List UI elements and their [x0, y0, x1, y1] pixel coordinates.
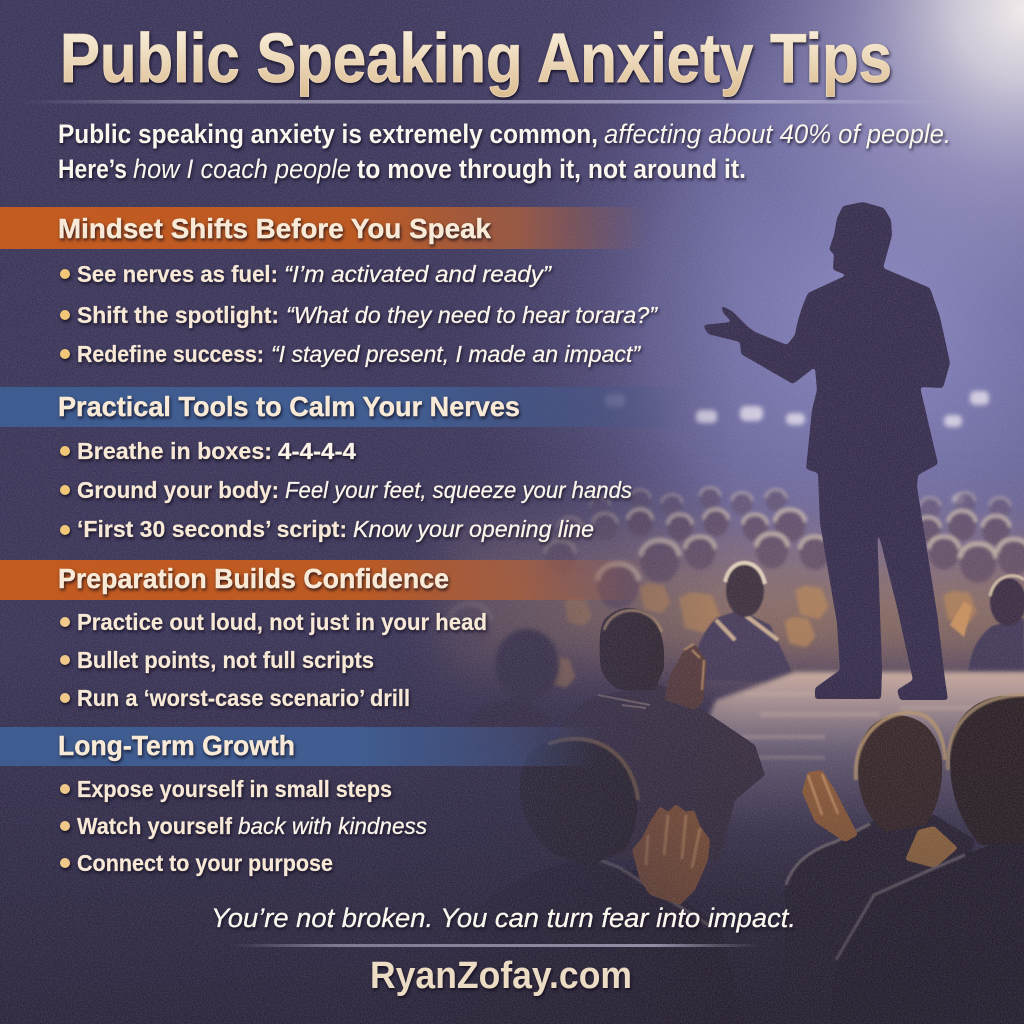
stage lights row — [605, 391, 989, 504]
title: Public Speaking Anxiety Tips — [60, 19, 892, 97]
audience member: foreground right — [785, 713, 975, 1024]
audience member: far right foreground — [828, 695, 1024, 1024]
section heading band: long-term growth — [0, 727, 600, 766]
section heading band: practical tools — [0, 387, 690, 427]
bullet: breathe in boxes — [60, 438, 356, 464]
bullet: see nerves as fuel: See nerves as fuel: — [77, 261, 278, 287]
section heading band: preparation: Preparation Builds Confidence — [58, 563, 449, 594]
bullet: expose yourself: Expose yourself in small steps — [77, 776, 392, 802]
closing line: You’re not broken. You can turn fear into impact. — [211, 903, 796, 933]
bullet: watch yourself back: Watch yourself — [77, 813, 232, 839]
intro text: affecting about 40% of people. — [604, 119, 951, 149]
bullet: practice out loud: Practice out loud, not just in your head — [77, 609, 487, 635]
bullet: watch yourself back: back with kindness — [238, 813, 427, 839]
bullet: worst-case drill: Run a ‘worst-case scenario’ drill — [77, 685, 410, 711]
right-row audience member — [950, 576, 1024, 672]
bullet: watch yourself back — [60, 813, 427, 839]
crowd in the distance — [440, 486, 1024, 745]
section heading band: mindset shifts: Mindset Shifts Before You Speak — [58, 213, 491, 244]
bullet: redefine success: “I stayed present, I made an impact” — [271, 341, 641, 367]
bullet: first 30 seconds — [60, 516, 594, 542]
bullet: connect to purpose: Connect to your purpose — [77, 850, 333, 876]
title divider — [20, 100, 950, 104]
panel: long-term growth — [0, 727, 600, 876]
panel: practical tools — [0, 387, 690, 542]
bullet: first 30 seconds: ‘First 30 seconds’ script: — [77, 516, 347, 542]
bullet: redefine success: Redefine success: — [77, 341, 264, 367]
bullet: ground your body: Feel your feet, squeeze your hands — [285, 477, 632, 503]
bullet: shift the spotlight: “What do they need to hear torara?” — [286, 302, 658, 328]
speaker silhouette — [703, 202, 950, 700]
bullet: breathe in boxes: 4-4-4-4 — [278, 438, 356, 464]
website: RyanZofay.com — [370, 955, 632, 997]
bullet: ground your body — [60, 477, 632, 503]
bullet: breathe in boxes: Breathe in boxes: — [77, 438, 272, 464]
bullet: redefine success — [60, 341, 641, 367]
section heading band: long-term growth: Long-Term Growth — [58, 730, 295, 761]
panel: preparation — [0, 560, 650, 711]
bullet: shift the spotlight: Shift the spotlight: — [77, 302, 279, 328]
bullet: see nerves as fuel — [60, 261, 552, 287]
bullet: ground your body: Ground your body: — [77, 477, 279, 503]
intro text: how I coach people — [133, 154, 351, 184]
audience member: foreground left — [440, 738, 745, 1024]
intro text — [58, 119, 951, 184]
audience member: clapping, centre — [540, 608, 765, 860]
section heading band: mindset shifts — [0, 207, 650, 249]
panel: mindset shifts — [0, 207, 658, 367]
footer divider — [230, 944, 760, 947]
mid-row audience member — [692, 563, 792, 682]
stage floor — [640, 672, 1024, 900]
section heading band: preparation — [0, 560, 650, 600]
intro text: Public speaking anxiety is extremely common, — [58, 119, 598, 149]
bullet: bullet points: Bullet points, not full scripts — [77, 647, 374, 673]
bullet: shift the spotlight — [60, 302, 658, 328]
bullet: see nerves as fuel: “I’m activated and ready” — [284, 261, 552, 287]
section heading band: practical tools: Practical Tools to Calm Your Nerves — [58, 391, 520, 422]
intro text: to move through it, not around it. — [357, 154, 746, 184]
intro text: Here’s — [58, 154, 127, 184]
dim audience head — [465, 629, 559, 745]
bullet: first 30 seconds: Know your opening line — [353, 516, 594, 542]
